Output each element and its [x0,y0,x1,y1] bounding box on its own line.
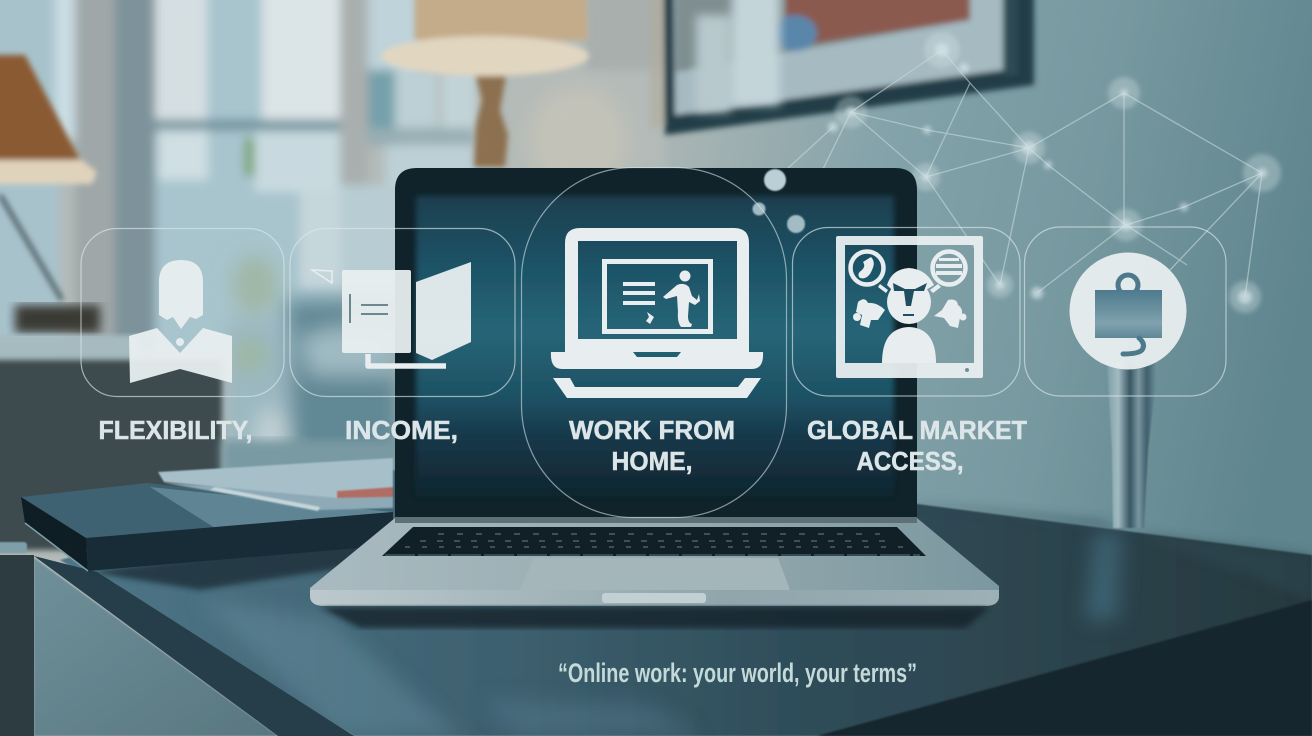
panel: work from home: HOME, [612,446,692,476]
laptop base [310,518,999,606]
desk front edge [34,556,354,736]
icon: person [129,260,232,383]
panel: income [290,228,515,445]
desk back edge highlight [863,497,1312,600]
panel: work from home [522,168,786,518]
label: FLEXIBILITY, [98,415,252,445]
desk side, dark corner [817,600,1312,736]
keyboard [382,527,926,556]
label: WORK FROM [569,415,735,445]
laptop [310,168,999,606]
network graph [775,32,1281,313]
icon: bag in circle [1070,252,1186,370]
laptop lid [395,168,917,518]
desk shadow under laptop [320,607,990,628]
laptop screen [416,196,894,496]
papers on desk [158,458,393,511]
left lamp [0,55,97,300]
panel: shopping bag [1024,227,1226,396]
label: INCOME, [345,415,458,445]
panel: global market access [792,228,1027,476]
icon: document and book [312,262,471,366]
cabinet front [34,558,278,736]
tagline: “Online work: your world, your terms” [558,658,917,688]
vase [1107,362,1158,528]
framed picture [650,0,1034,135]
folder on desk [21,483,393,571]
desk top [60,470,1312,736]
panel: global market access: ACCESS, [856,446,964,476]
touchpad [520,558,790,590]
folder shadow [90,530,395,590]
icon: person in frame with speech bubbles [836,236,983,378]
center lamp [381,0,589,167]
panel: flexibility [81,228,284,445]
label: GLOBAL MARKET [807,415,1027,445]
icon: laptop with person [551,228,763,398]
desk streaks [200,532,1122,736]
floating dots [752,169,805,233]
